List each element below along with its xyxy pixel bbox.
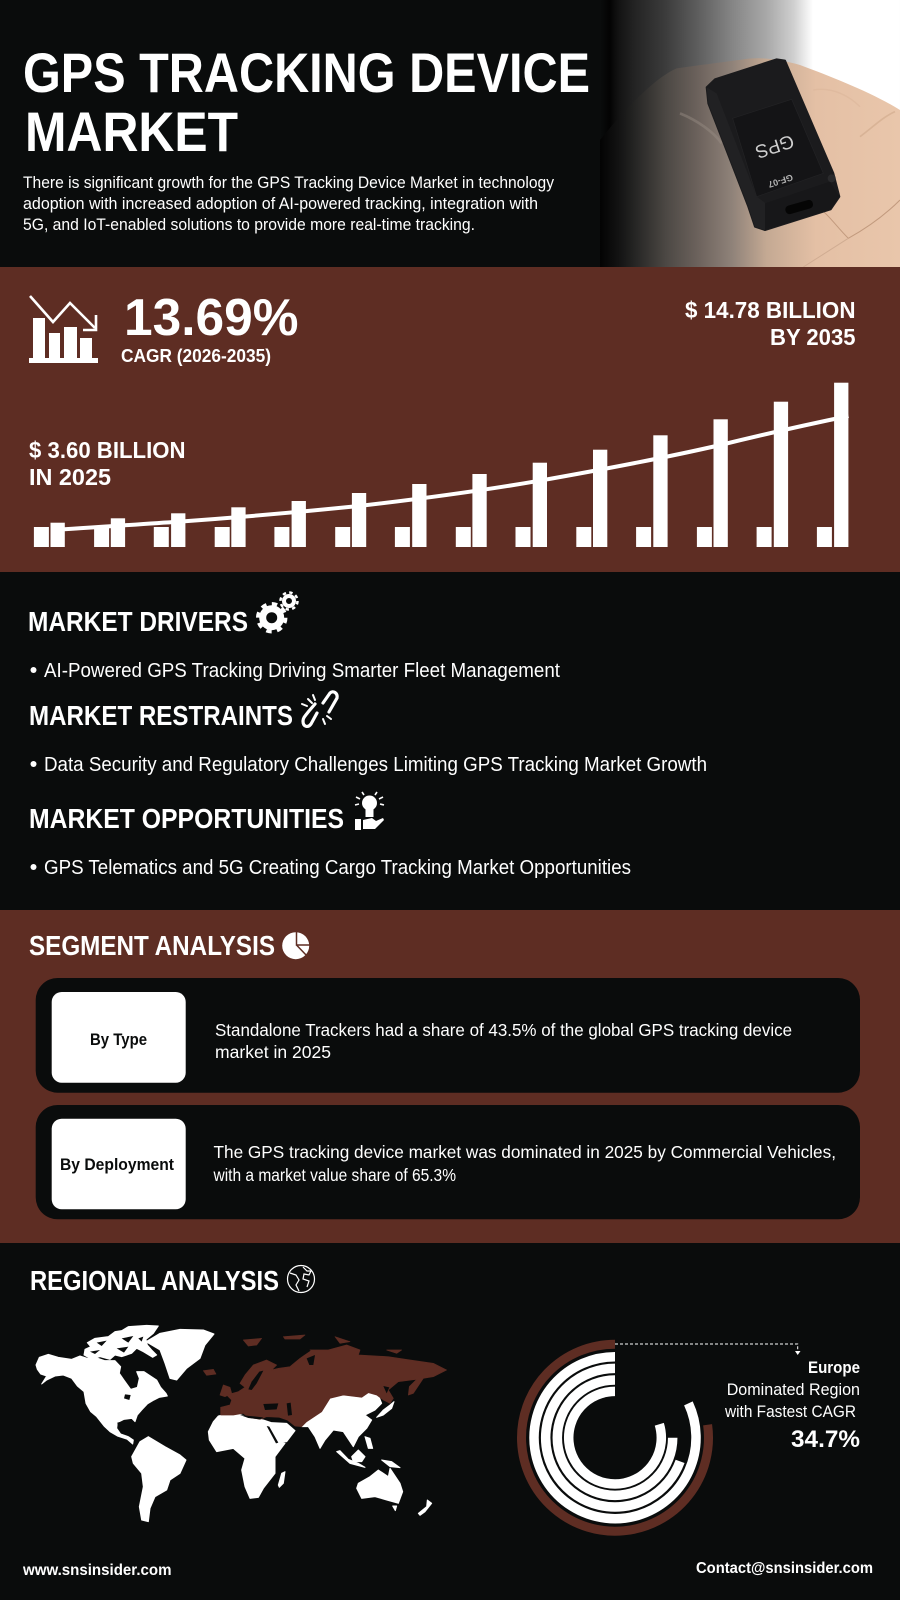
- icon: broken chain link: [302, 692, 337, 726]
- label: by deployment: By Deployment: [60, 1156, 174, 1174]
- heading: market drivers: MARKET DRIVERS: [28, 606, 248, 637]
- heading: market opportunities: MARKET OPPORTUNITIES: [29, 803, 344, 834]
- text: by deployment: [213, 1142, 836, 1185]
- radial bar chart: [522, 1344, 709, 1531]
- photo: hand holding GPS device: GF-07: [767, 172, 794, 190]
- text: by deployment: The GPS tracking device market was dominated in 2025 by Commercial Vehicles,: [214, 1142, 836, 1162]
- base value: IN 2025: [29, 464, 111, 490]
- base value: [29, 437, 186, 490]
- panel: market size: [0, 267, 900, 572]
- heading: segment analysis: SEGMENT ANALYSIS: [29, 930, 275, 961]
- restraint item: Data Security and Regulatory Challenges Limiting GPS Tracking Market Growth: [44, 754, 707, 776]
- callout: Europe: with Fastest CAGR: [724, 1403, 856, 1421]
- forecast value: [685, 297, 856, 350]
- heading: regional analysis: REGIONAL ANALYSIS: [30, 1265, 279, 1296]
- label box: by type: [52, 992, 186, 1083]
- intro paragraph: adoption with increased adoption of AI-powered tracking, integration with: [23, 195, 538, 213]
- intro paragraph: [23, 174, 555, 234]
- CAGR value: 13.69%: [124, 289, 298, 347]
- bar chart with growth line: [34, 383, 848, 547]
- callout: Europe: Europe: [808, 1358, 860, 1377]
- intro paragraph: There is significant growth for the GPS Tracking Device Market in technology: [23, 174, 555, 192]
- opportunity item: GPS Telematics and 5G Creating Cargo Tracking Market Opportunities: [44, 857, 631, 879]
- icon: bulb in hand: [355, 792, 384, 830]
- icon: gears: [258, 592, 298, 632]
- arrow: dashed callout leader: [615, 1344, 800, 1355]
- icon: globe: [288, 1266, 314, 1292]
- photo: hand holding GPS device: GPS: [753, 131, 797, 163]
- text: by deployment: with a market value share of 65.3%: [213, 1165, 456, 1185]
- forecast value: $ 14.78 BILLION: [685, 297, 856, 323]
- callout: Europe: Dominated Region: [727, 1381, 860, 1399]
- photo: hand holding GPS device: [600, 0, 900, 267]
- icon: pie chart: [282, 931, 311, 959]
- forecast value: BY 2035: [770, 324, 856, 350]
- text: by type: [215, 1020, 792, 1062]
- footer: website: www.snsinsider.com: [22, 1562, 172, 1579]
- heading: market restraints: MARKET RESTRAINTS: [29, 700, 293, 731]
- label: by type: By Type: [90, 1031, 147, 1049]
- panel: drivers, restraints, opportunities: [28, 592, 707, 879]
- base value: $ 3.60 BILLION: [29, 437, 186, 463]
- text: by type: Standalone Trackers had a share of 43.5% of the global GPS tracking device: [215, 1020, 792, 1040]
- callout: Europe: 34.7%: [791, 1426, 860, 1453]
- title: GPS TRACKING DEVICE: [23, 41, 590, 104]
- callout: Europe: [724, 1358, 860, 1453]
- card: by deployment: [36, 1105, 860, 1219]
- icon: chart with trend arrow: [29, 296, 98, 363]
- title: [23, 41, 590, 163]
- panel: segment analysis: [0, 910, 900, 1243]
- intro paragraph: 5G, and IoT-enabled solutions to provide more real-time tracking.: [23, 216, 475, 234]
- CAGR label: CAGR (2026-2035): [121, 345, 271, 366]
- driver item: AI-Powered GPS Tracking Driving Smarter Fleet Management: [44, 660, 560, 682]
- panel: header: [23, 0, 900, 267]
- panel: regional analysis: [30, 1265, 860, 1531]
- card: by type: [36, 978, 860, 1093]
- world map: [36, 1325, 447, 1522]
- label box: by deployment: [52, 1119, 186, 1209]
- text: by type: market in 2025: [215, 1042, 331, 1062]
- footer: contact: Contact@snsinsider.com: [696, 1560, 873, 1577]
- title: MARKET: [25, 100, 238, 163]
